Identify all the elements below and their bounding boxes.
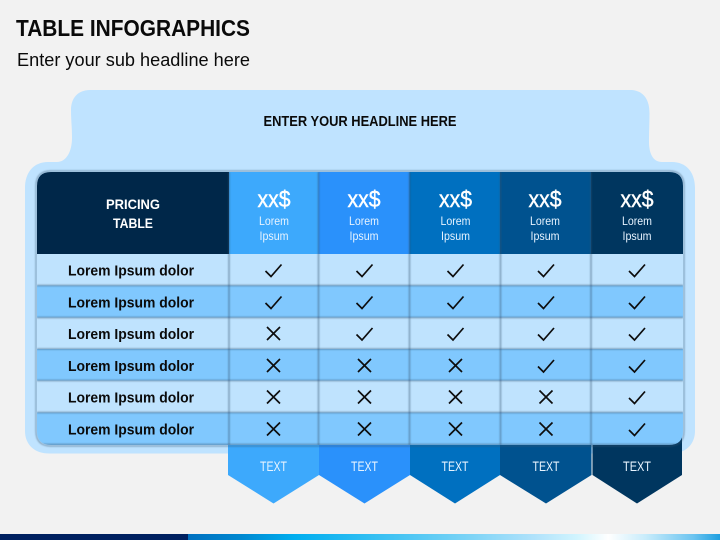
price: column 2: Ipsum	[350, 231, 378, 243]
chevron: column 1 footer	[228, 445, 319, 504]
price: column 1: Ipsum	[260, 231, 288, 243]
table	[37, 172, 683, 445]
table shadow	[36, 171, 684, 446]
icons: check marks and crosses	[266, 264, 645, 436]
subtitle: Enter your sub headline here	[17, 50, 250, 70]
panel: backing shape	[25, 90, 695, 454]
chevron: column 4 footer	[500, 445, 592, 504]
price: column 1: Lorem	[259, 216, 289, 228]
row 3 icons	[267, 327, 645, 340]
price: column 2: xx$	[348, 186, 381, 212]
chevron: column 3 footer	[410, 445, 500, 504]
price: column 4: xx$	[528, 186, 562, 212]
table rows	[37, 254, 683, 445]
row labels: Lorem Ipsum dolor	[68, 262, 194, 280]
price: column 4	[528, 186, 562, 243]
heading: panel headline: ENTER YOUR HEADLINE HERE	[264, 114, 457, 130]
chevron: column 5 footer	[592, 428, 682, 504]
price: column 3	[439, 186, 472, 243]
row labels: Lorem Ipsum dolor	[68, 390, 194, 406]
row 1 icons	[266, 264, 645, 276]
price: column 2: Lorem	[349, 216, 379, 228]
footer bar	[0, 534, 720, 540]
table header cells	[37, 172, 683, 254]
title: TABLE INFOGRAPHICS	[16, 15, 250, 41]
price: column 5: xx$	[620, 186, 654, 212]
price: column 4: Lorem	[530, 216, 560, 228]
price: column 4: Ipsum	[530, 231, 560, 243]
row labels: Lorem Ipsum dolor	[68, 326, 194, 343]
heading: pricing table: PRICING	[106, 196, 160, 212]
price: column 1: xx$	[258, 186, 291, 212]
price: column 2	[348, 186, 381, 243]
row labels: Lorem Ipsum dolor	[68, 294, 194, 312]
row labels: Lorem Ipsum dolor	[68, 358, 194, 375]
price: column 3: Lorem	[440, 216, 470, 228]
row 5 icons	[267, 390, 645, 404]
chevron: column 2 footer	[319, 445, 410, 504]
chevron: column 4 footer: TEXT	[532, 459, 560, 474]
price: column 3: xx$	[439, 186, 472, 212]
chevron: column 2 footer: TEXT	[351, 459, 378, 474]
price: column 5	[620, 186, 654, 243]
chevron: column 5 footer: TEXT	[623, 459, 651, 474]
price: column 3: Ipsum	[441, 231, 470, 243]
row 2 icons	[266, 296, 645, 308]
row 4 icons	[267, 359, 645, 372]
chevron: column 3 footer: TEXT	[442, 459, 468, 474]
price: column 1	[258, 186, 291, 243]
row labels: Lorem Ipsum dolor	[68, 422, 194, 438]
price: column 5: Lorem	[622, 216, 652, 228]
price: column 5: Ipsum	[622, 231, 652, 243]
chevron: column 1 footer: TEXT	[260, 459, 287, 474]
row labels	[68, 262, 194, 438]
row 6 icons	[267, 422, 645, 436]
heading: pricing table second line: TABLE	[113, 215, 153, 231]
